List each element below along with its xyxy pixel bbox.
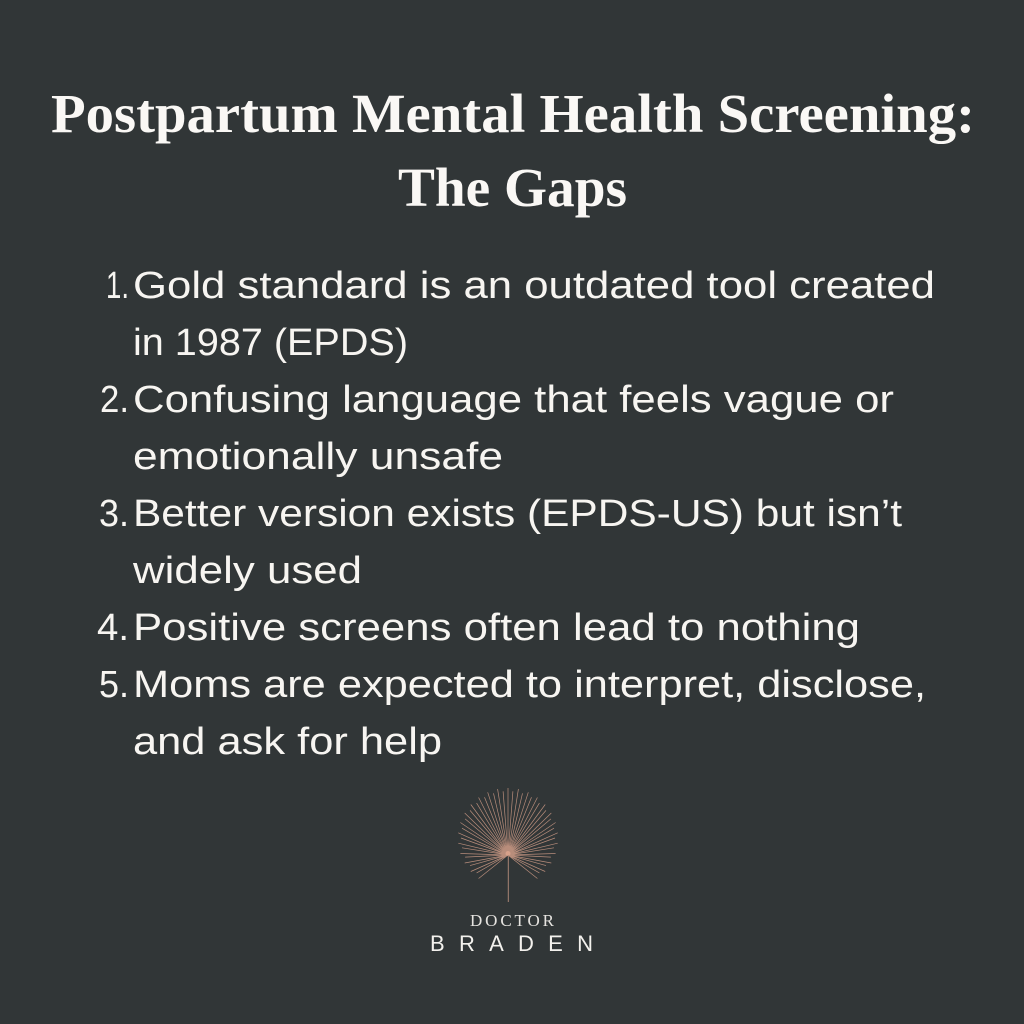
list item 5: [99, 664, 926, 763]
logo text: BRADEN: BRADEN: [430, 931, 593, 956]
title: [51, 83, 975, 218]
list item 2: [100, 379, 894, 478]
list item 1: [106, 265, 935, 364]
list item 5: and ask for help: [133, 721, 442, 763]
list item 3: 3.: [99, 493, 129, 535]
title: The Gaps: [398, 157, 627, 218]
list item 2: emotionally unsafe: [133, 436, 503, 478]
list item 3: Better version exists (EPDS-US) but isn’t: [133, 493, 902, 535]
icon: palm fan: [458, 788, 558, 902]
logo text: DOCTOR: DOCTOR: [470, 911, 555, 930]
list item 1: 1.: [106, 265, 129, 307]
list item 4: 4.: [97, 607, 129, 649]
list item 5: Moms are expected to interpret, disclose,: [133, 664, 926, 706]
list item 3: widely used: [132, 550, 362, 592]
list item 5: 5.: [99, 664, 129, 706]
list item 4: Positive screens often lead to nothing: [133, 607, 860, 649]
list item 1: Gold standard is an outdated tool created: [133, 265, 935, 307]
logo: Doctor Braden: [430, 788, 593, 956]
list item 2: 2.: [100, 379, 129, 421]
list item 3: [99, 493, 902, 592]
list item 1: in 1987 (EPDS): [133, 322, 408, 364]
numbered list: [97, 265, 935, 763]
list item 2: Confusing language that feels vague or: [133, 379, 894, 421]
title: Postpartum Mental Health Screening:: [51, 83, 975, 144]
